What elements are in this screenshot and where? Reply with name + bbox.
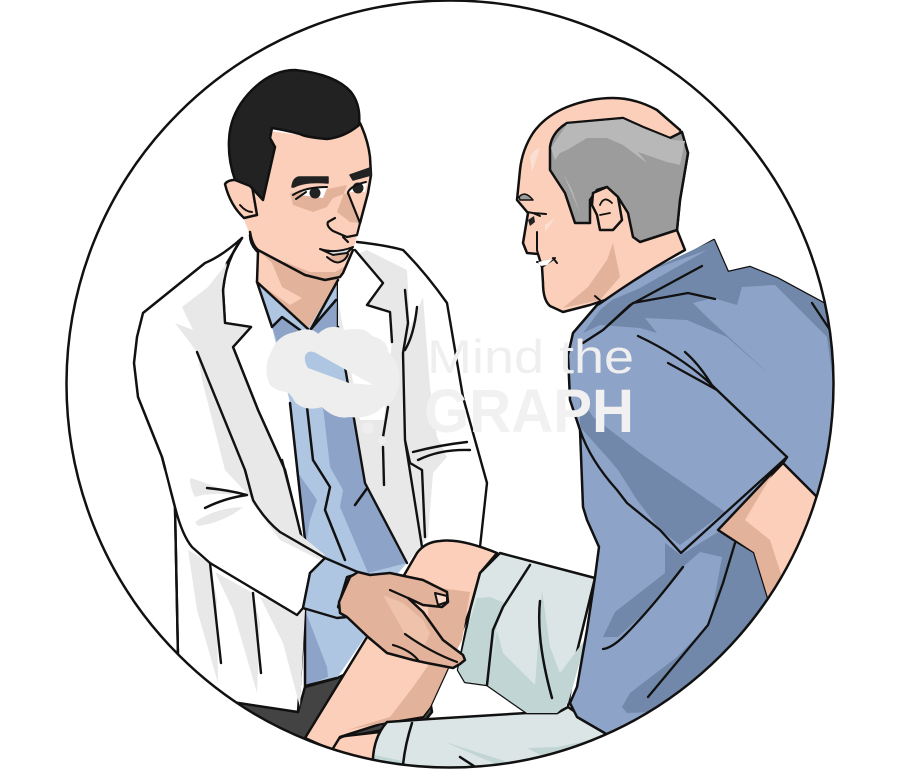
patient face details (519, 194, 533, 200)
doctor face (225, 122, 371, 280)
grey hair (550, 118, 688, 242)
patient head (517, 98, 688, 312)
neck outline (250, 235, 338, 329)
doctor hair (229, 70, 359, 200)
patient arm (720, 464, 815, 597)
coat sleeve (163, 470, 325, 615)
doctor (134, 70, 487, 745)
patient (305, 98, 845, 772)
watermark text: GRAPH: GRAPH (424, 377, 634, 445)
nose and mouth (328, 193, 360, 242)
eyes and brows (292, 168, 371, 187)
knee and thigh (305, 540, 497, 750)
lab coat left panel (134, 238, 305, 712)
sleeve shading and folds (190, 478, 325, 560)
watermark brain logo (266, 326, 390, 438)
doctor shirt (257, 280, 407, 686)
shorts (458, 553, 595, 713)
watermark (266, 327, 634, 445)
doctor trousers (242, 674, 434, 738)
far trouser leg (372, 706, 604, 766)
shirt shadows (583, 240, 832, 374)
far leg (334, 732, 378, 758)
lab coat right panel (338, 242, 487, 563)
patient ear (592, 187, 622, 230)
watermark text: Mind the: Mind the (427, 330, 634, 383)
scene clipped to circle (134, 70, 845, 772)
doctor neck (254, 244, 338, 328)
patient shirt (568, 240, 845, 735)
doctor hand (339, 572, 465, 668)
shirt cuff (303, 558, 360, 618)
neck highlight (257, 250, 302, 305)
shirt lines (580, 266, 830, 697)
sleeve outline (162, 457, 325, 615)
ear (225, 180, 257, 218)
